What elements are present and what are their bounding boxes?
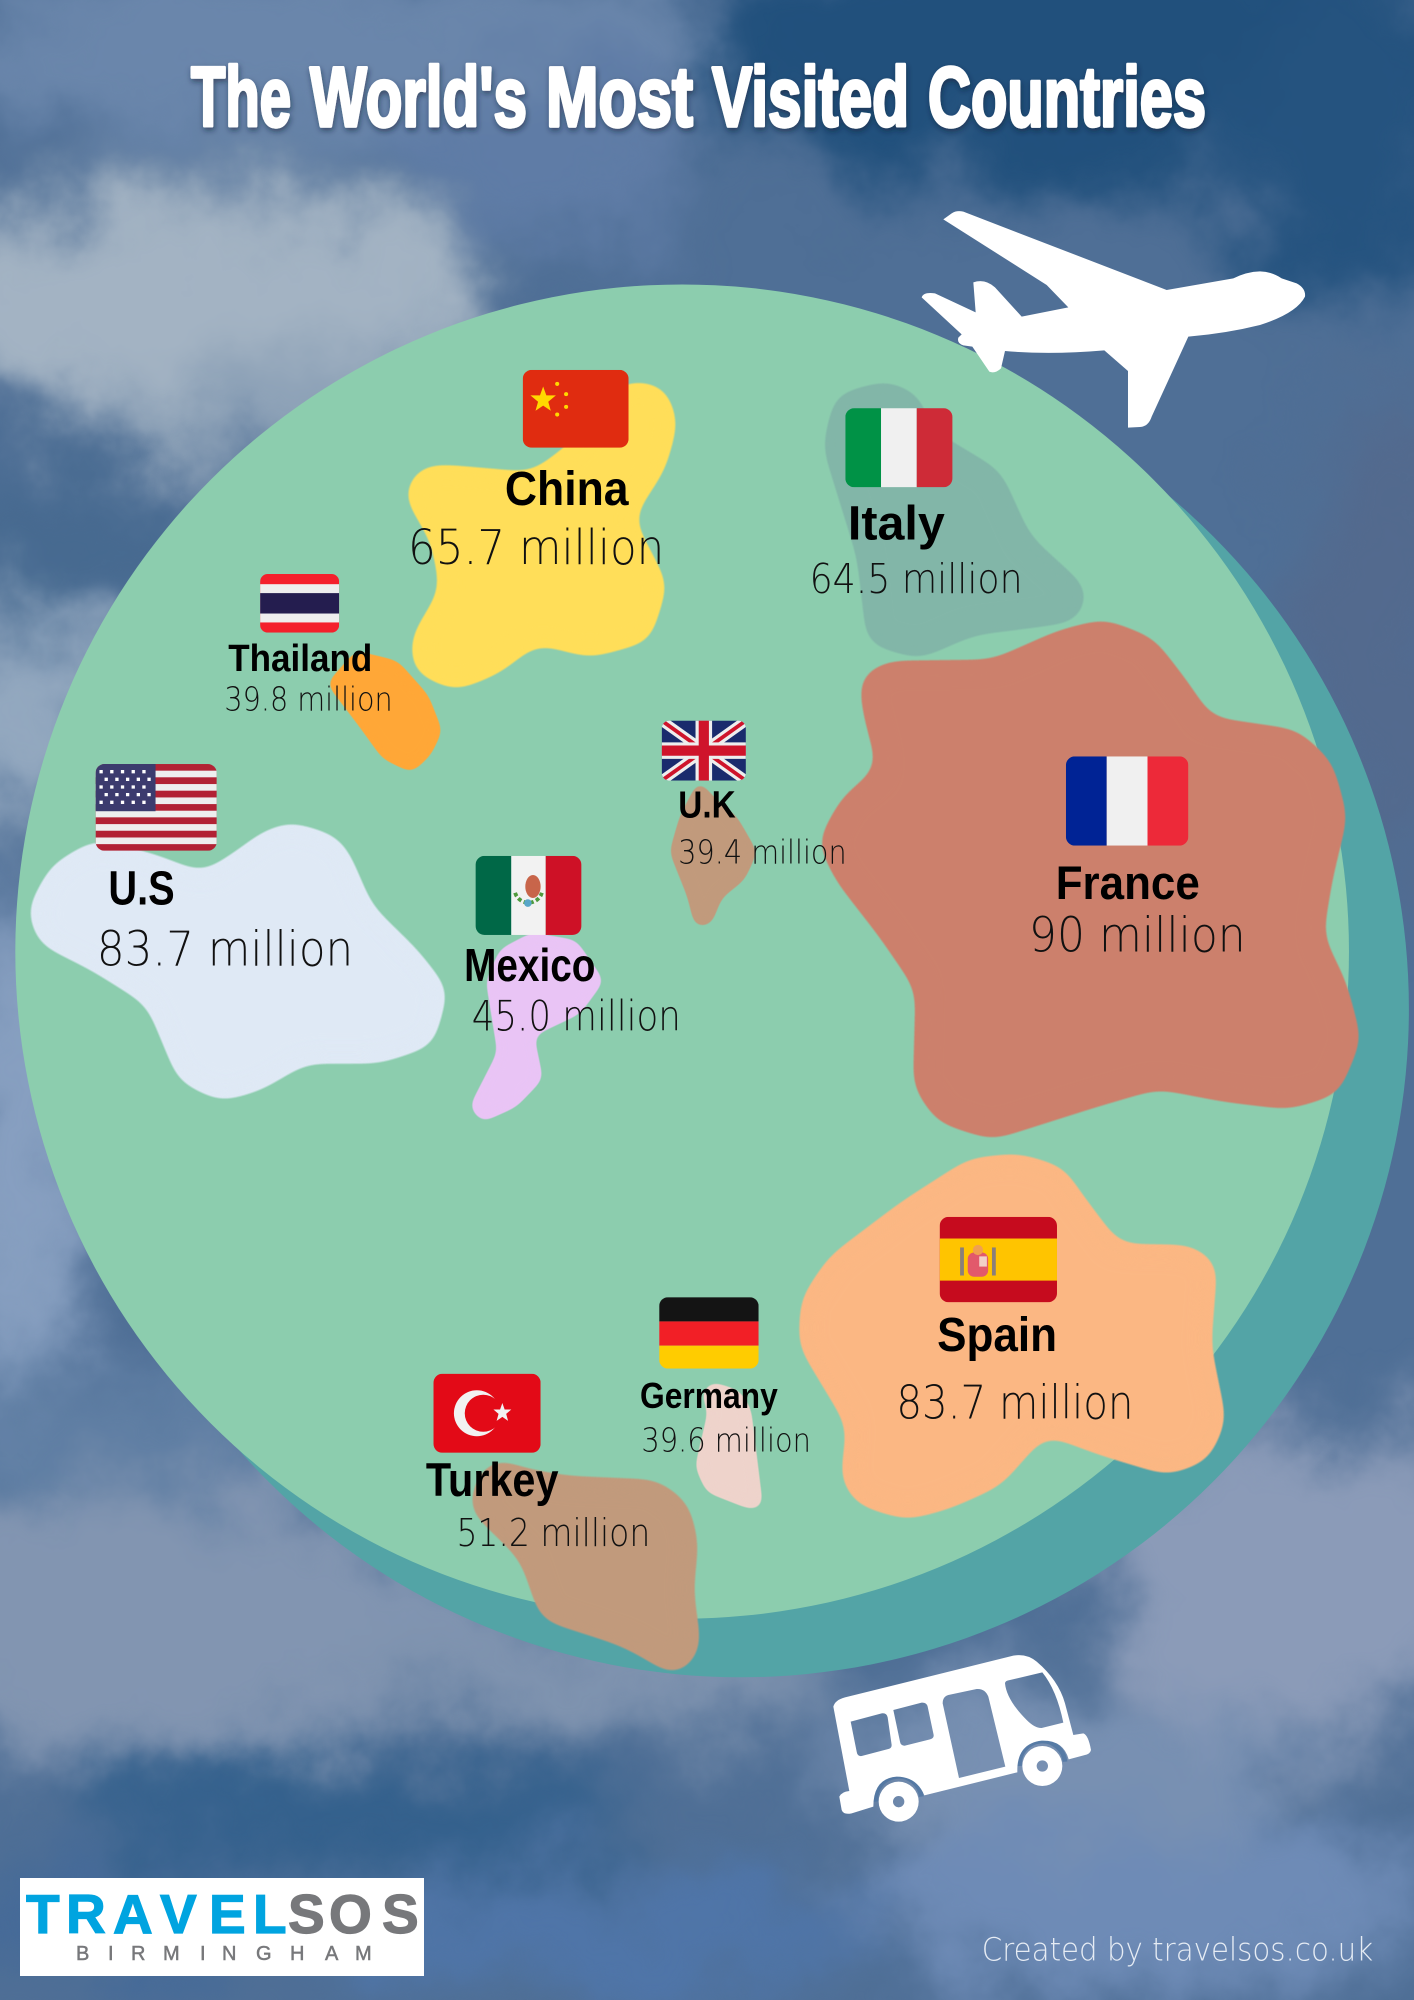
name: U.K: U.K [678,784,736,827]
value: Thailand: 39.8 million [224,679,393,718]
logo wordmark: TRAVEL [26,1883,287,1945]
panel: Turkey [426,1374,701,1676]
panel: Mexico [464,856,681,1122]
icon: airplane [922,211,1305,428]
title: The [191,50,291,144]
credit: Created by travelsos.co.uk [982,1930,1373,1968]
blob: Spain [798,1153,1227,1520]
flag: U.S [96,764,217,851]
panel: United States [27,764,449,1102]
blob: Mexico [469,932,604,1122]
icon: bus [833,1655,1091,1822]
flag: Turkey [434,1374,541,1453]
blob: U.K [669,779,757,927]
flag: Germany [659,1297,759,1369]
blob: Thailand [326,651,442,773]
logo: Travel SOS Birmingham: SOS [288,1883,419,1945]
value: Turkey: 51.2 million [456,1511,650,1556]
flag: U.K [662,721,746,781]
value: U.S: 83.7 million [97,922,353,978]
blob: France [817,619,1362,1140]
flag: Spain [940,1217,1057,1302]
panel: Spain [798,1153,1227,1520]
blob: U.S [27,821,449,1102]
panel: United Kingdom [662,721,847,927]
value: U.K: 39.4 million [678,833,847,872]
name: Thailand: Thailand [228,637,372,680]
globe shadow [73,341,1409,1677]
value: Mexico: 45.0 million [472,992,681,1041]
logo subtitle: BIRMINGHAM [76,1943,372,1965]
name: Mexico: Mexico [464,939,595,991]
name: U.S: U.S [108,861,175,915]
bus body with windows [833,1655,1091,1814]
value: Spain: 83.7 million [896,1375,1133,1429]
panel: Thailand [224,574,442,773]
name: Italy: Italy [848,497,945,551]
flag: France [1066,756,1188,846]
value: China: 65.7 million [408,520,664,576]
flag: Thailand [260,574,339,633]
title [191,50,1206,144]
flag: Italy [845,408,952,487]
value: Italy: 64.5 million [810,555,1023,603]
panel: Italy [810,380,1089,659]
name: Turkey: Turkey [426,1453,558,1506]
flag: Mexico [476,856,581,935]
title: Most [546,50,693,144]
title: World's [310,50,527,144]
blob: China [403,380,678,691]
globe [15,284,1409,1677]
panel: Germany [640,1297,811,1509]
blob: Germany [695,1381,762,1509]
globe face [15,284,1349,1619]
value: France: 90 million [1029,908,1246,964]
bus wheels [879,1746,1062,1822]
name: France: France [1056,856,1200,909]
blob: Italy [822,380,1089,659]
bus wheel arches [876,1741,1065,1802]
value: Germany: 39.6 million [641,1421,811,1460]
title: Visited [712,50,909,144]
flag: China [523,370,629,448]
blob: Turkey [468,1458,701,1676]
name: Germany: Germany [640,1376,778,1416]
name: Spain: Spain [937,1308,1057,1362]
logo: Travel SOS Birmingham [20,1878,424,1976]
panel: France [817,619,1362,1140]
panel: China [403,370,678,691]
name: China: China [505,462,630,516]
title: Countries [928,50,1206,144]
